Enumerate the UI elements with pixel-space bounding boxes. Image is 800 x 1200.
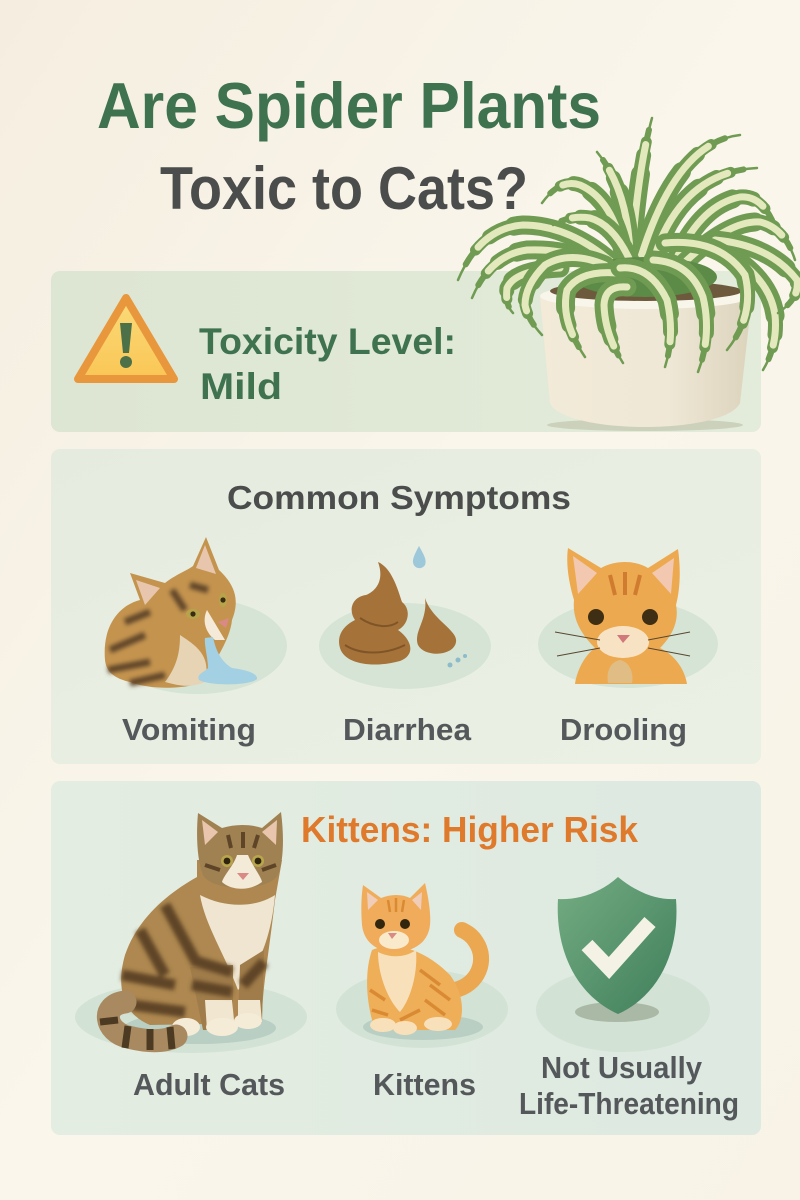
toxicity text: Toxicity Level: [199,321,456,362]
symptom labels: Drooling [560,712,687,747]
toxicity text: Mild [200,366,282,407]
symptoms heading: Common Symptoms [227,479,571,516]
illustration: spider plant in pot [458,118,797,431]
risk heading: Kittens: Higher Risk [301,809,639,850]
risk labels: Kittens [373,1067,476,1102]
toxicity text [199,321,456,407]
title: Toxic to Cats? [160,155,528,222]
risk labels [133,1050,739,1121]
risk labels: Adult Cats [133,1067,285,1102]
symptom labels: Vomiting [122,712,256,747]
risk labels: Not Usually [541,1050,703,1085]
plant leaves: back [458,118,795,313]
symptom: vomiting [105,537,287,694]
panel: common symptoms [51,449,761,764]
risk labels: Life-Threatening [519,1086,739,1121]
title: Are Spider Plants [97,69,601,142]
panel: kittens higher risk [51,781,761,1135]
symptom: drooling [538,548,718,688]
symptom labels: Diarrhea [343,712,472,747]
pot [540,281,752,431]
icon: shield with check [536,877,710,1052]
symptom: diarrhea [319,546,491,689]
symptom labels [122,712,687,747]
panel: toxicity level [51,271,761,432]
adult cat [75,812,307,1053]
title [97,69,601,222]
plant crown shadow [573,257,717,297]
plant leaves: drooping front [525,240,797,372]
kitten [336,883,508,1048]
icon: warning triangle [78,298,174,379]
